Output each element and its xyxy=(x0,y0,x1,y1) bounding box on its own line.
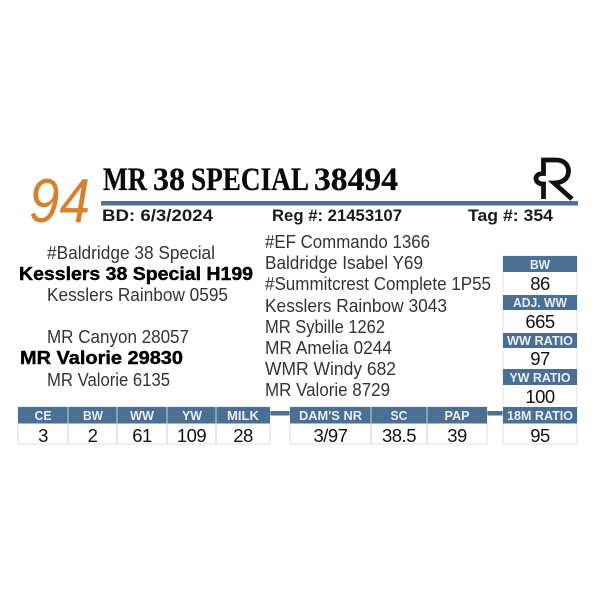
header labels: PAP xyxy=(444,409,470,423)
info row xyxy=(102,207,554,225)
values: 109 xyxy=(177,425,206,446)
header labels: DAM'S NR xyxy=(299,409,362,423)
header labels: MILK xyxy=(227,409,259,423)
values: 2 xyxy=(88,425,98,446)
values: 100 xyxy=(525,386,555,407)
sire's sire: #Baldridge 38 Special xyxy=(47,243,215,263)
dam: MR Valorie 29830 xyxy=(20,348,183,368)
values: 61 xyxy=(132,425,152,446)
ancestor 7: WMR Windy 682 xyxy=(265,359,396,379)
table: weights and ratios xyxy=(503,256,577,446)
tag number: Tag #: 354 xyxy=(468,207,554,225)
ancestor 3: #Summitcrest Complete 1P55 xyxy=(265,274,491,294)
header labels xyxy=(34,409,259,423)
birth date: BD: 6/3/2024 xyxy=(102,207,214,225)
title: 38 xyxy=(153,162,185,198)
score: 94: 94 xyxy=(29,167,90,236)
header labels: ADJ. WW xyxy=(513,296,567,310)
values: 39 xyxy=(447,425,467,446)
title: MR xyxy=(103,162,148,198)
header labels xyxy=(507,258,573,423)
table: dam and carcass xyxy=(290,407,487,446)
header labels: YW xyxy=(182,409,202,423)
values: 665 xyxy=(525,311,555,332)
dam's dam: MR Valorie 6135 xyxy=(47,370,170,390)
header labels xyxy=(299,409,470,423)
ancestor 6: MR Amelia 0244 xyxy=(265,338,392,358)
title xyxy=(103,162,398,198)
values: 95 xyxy=(530,425,550,446)
values: 28 xyxy=(233,425,253,446)
values: 38.5 xyxy=(382,425,416,446)
ancestor 1: #EF Commando 1366 xyxy=(265,232,430,252)
values xyxy=(313,425,467,446)
header rule xyxy=(101,201,578,206)
ancestor 5: MR Sybille 1262 xyxy=(265,317,385,337)
dam's sire: MR Canyon 28057 xyxy=(47,327,189,347)
header labels: BW xyxy=(530,258,550,272)
title: 38494 xyxy=(314,162,398,198)
header labels: WW xyxy=(130,409,154,423)
pedigree: left column xyxy=(19,243,253,390)
pedigree: right column xyxy=(265,232,491,400)
title: SPECIAL xyxy=(191,162,309,198)
ancestor 4: Kesslers Rainbow 3043 xyxy=(265,296,447,316)
header labels: SC xyxy=(390,409,408,423)
connectors between tables xyxy=(270,411,503,416)
table: EPDs xyxy=(18,407,270,446)
icon: R logo xyxy=(536,160,572,199)
ancestor 2: Baldridge Isabel Y69 xyxy=(265,253,423,273)
values: 86 xyxy=(530,273,550,294)
ancestor 8: MR Valorie 8729 xyxy=(265,380,390,400)
registration number: Reg #: 21453107 xyxy=(272,207,402,225)
header labels: WW RATIO xyxy=(507,334,573,348)
header labels: BW xyxy=(83,409,103,423)
sire's dam: Kesslers Rainbow 0595 xyxy=(47,285,228,305)
values: 3 xyxy=(38,425,48,446)
header labels: 18M RATIO xyxy=(507,409,573,423)
values xyxy=(38,425,253,446)
header labels: YW RATIO xyxy=(510,371,571,385)
header labels: CE xyxy=(34,409,52,423)
values: 3/97 xyxy=(313,425,348,446)
sire: Kesslers 38 Special H199 xyxy=(19,264,253,284)
values xyxy=(525,273,555,446)
values: 97 xyxy=(530,348,550,369)
